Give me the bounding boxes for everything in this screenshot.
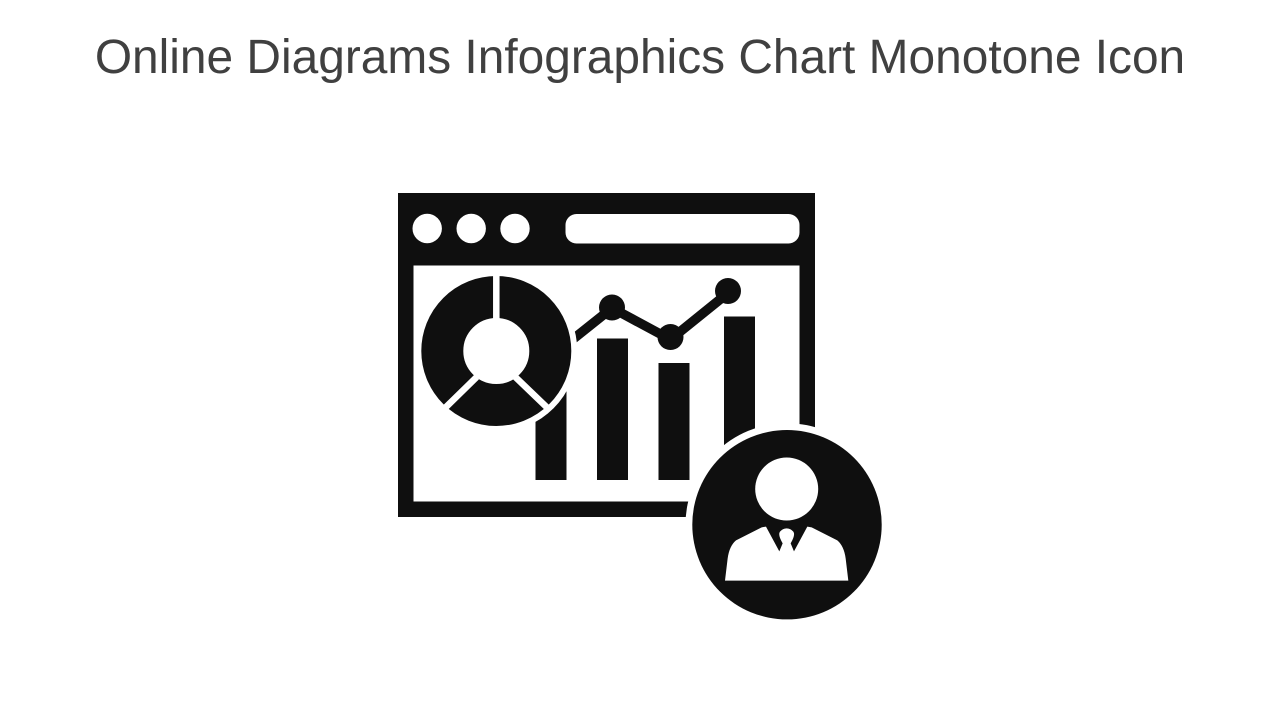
address bar <box>566 214 800 244</box>
user suit <box>725 527 848 581</box>
user badge <box>686 423 888 626</box>
window frame <box>398 193 815 517</box>
title: Online Diagrams Infographics Chart Monotone Icon <box>95 31 1185 84</box>
window control dots <box>412 214 530 243</box>
browser window <box>398 193 815 517</box>
donut chart <box>415 270 577 432</box>
line chart <box>560 278 741 350</box>
bar chart <box>536 316 755 480</box>
user head <box>755 458 818 520</box>
